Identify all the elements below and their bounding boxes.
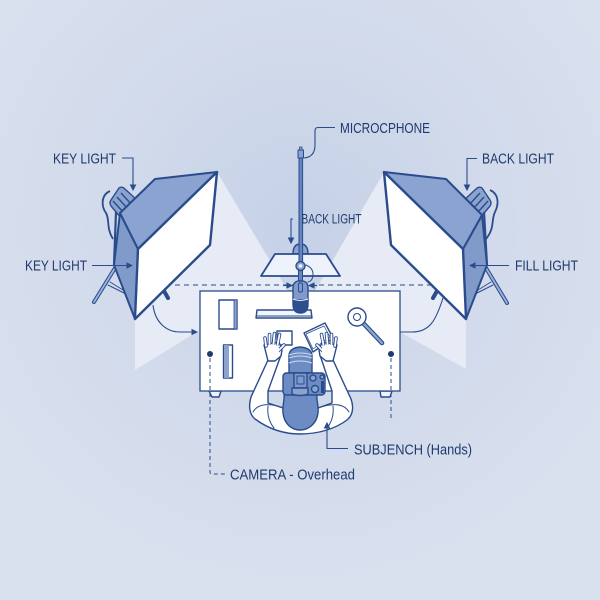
curved arrow: left: [153, 305, 197, 332]
right hand: [317, 334, 337, 361]
camera lens: [289, 347, 312, 373]
label: fill light: FILL LIGHT: [515, 258, 578, 274]
leader: camera: [210, 358, 225, 474]
light beam: right: [315, 172, 466, 369]
marker: right dot: [388, 351, 394, 357]
table leg: right: [380, 391, 392, 397]
label: key light side: KEY LIGHT: [25, 258, 87, 274]
dashed guide: right: [390, 358, 392, 419]
front diffuser: [135, 172, 217, 319]
guide line: dashed horizontal: [175, 284, 432, 286]
joint and loop: [296, 262, 313, 285]
lamp head and cable: [463, 187, 498, 265]
person with camera: [250, 323, 353, 434]
stand: left: [94, 268, 168, 302]
microphone stand: [261, 147, 340, 313]
table object: slim bar: [224, 345, 232, 378]
camera body: [283, 373, 325, 396]
head: [283, 393, 318, 430]
label: key light top: [53, 152, 133, 190]
card: right: [304, 323, 333, 352]
table object: book: [219, 300, 237, 329]
sleeves: [253, 405, 349, 428]
side panel: [114, 213, 138, 319]
label: subject hands: SUBJENCH (Hands): [354, 442, 472, 458]
left hand: [264, 334, 284, 361]
top panel: [120, 172, 217, 249]
clamp arrows: [283, 284, 317, 286]
label: back light center: BACK LIGHT: [302, 212, 362, 226]
softbox: right: [384, 172, 507, 319]
curved arrow: right: [400, 298, 443, 332]
card: left: [277, 331, 292, 345]
label: microphone: MICROCPHONE: [340, 121, 430, 137]
top panel: [384, 172, 482, 249]
side panel: [463, 215, 487, 319]
table top: [200, 291, 400, 391]
front diffuser: [384, 172, 466, 319]
marker: left dot: [207, 351, 213, 357]
table leg: left: [209, 391, 221, 397]
lamp head and cable: [103, 187, 138, 265]
softbox: left: [94, 172, 217, 319]
label: key light top: KEY LIGHT: [53, 152, 116, 168]
stand: right: [433, 268, 507, 303]
label: microphone: [304, 121, 430, 158]
label: camera overhead: CAMERA - Overhead: [230, 468, 355, 484]
table: [200, 291, 400, 397]
label: back light right: [467, 152, 554, 190]
microphone body: [293, 281, 308, 313]
torso and arms: [250, 355, 353, 434]
label: back light center: [291, 212, 362, 243]
label: back light right: BACK LIGHT: [482, 152, 554, 168]
label: fill light: [470, 258, 578, 274]
table object: magnifier: [348, 308, 382, 343]
pole: [298, 147, 304, 267]
label: subject hands: [327, 423, 472, 458]
table object: ruler: [256, 310, 312, 318]
light panel: [261, 244, 340, 276]
light beam: left: [135, 172, 288, 370]
